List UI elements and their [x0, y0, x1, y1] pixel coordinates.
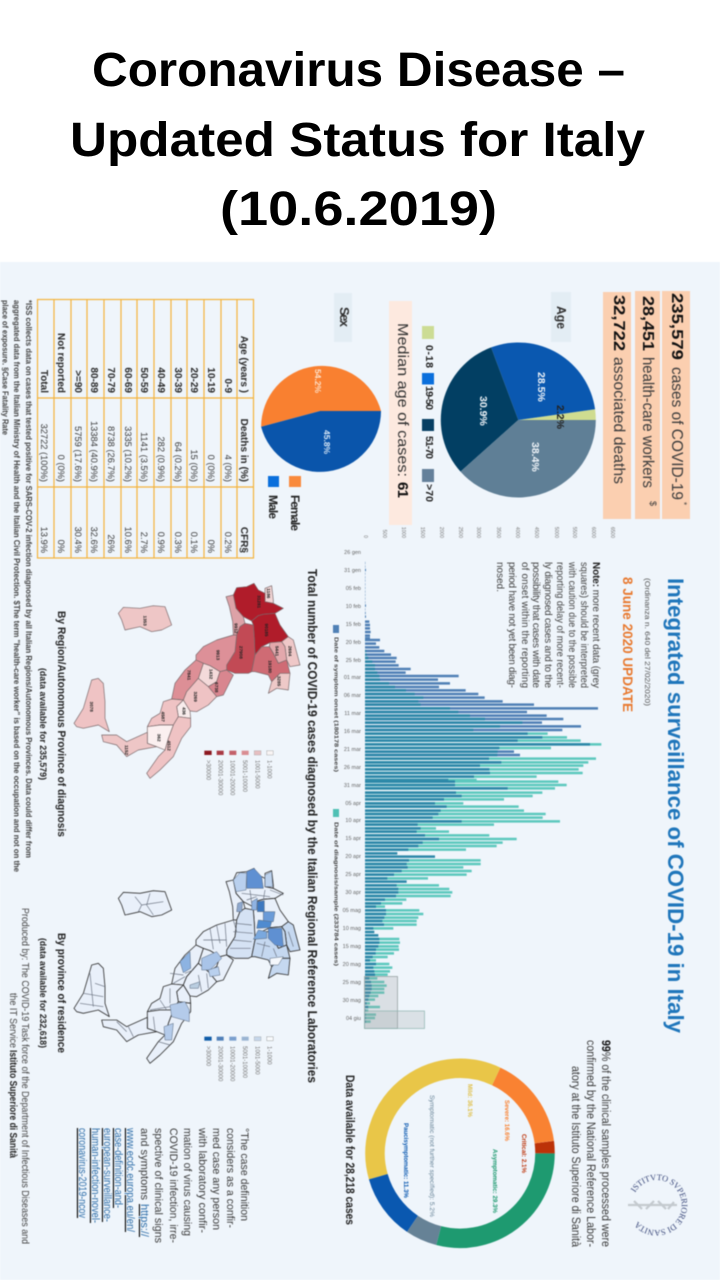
- deaths by age table: 80-89: [88, 367, 99, 393]
- sex pie chart: 45.8%: [322, 430, 332, 455]
- stat boxes: cases of COVID-19: [668, 367, 685, 500]
- ordinance subtitle: (Ordinanza n. 640 del 27/02/2020): [643, 578, 652, 707]
- deaths by age table: 26%: [106, 534, 116, 553]
- value axis labels: 3500: [495, 527, 501, 538]
- value axis labels: 3000: [475, 527, 481, 538]
- case definition text: spective of clinical signs: [152, 1128, 164, 1243]
- map: cases by region: 1432: [208, 669, 213, 680]
- date axis labels: 16 mar: [344, 729, 361, 735]
- province map caption: (data available for 232,618): [38, 938, 48, 1048]
- deaths by age table: 30.4%: [73, 527, 83, 553]
- deaths by age table: 50-59: [138, 367, 149, 393]
- footnote: place of exposure. §Case Fatality Rate: [0, 300, 10, 436]
- map: cases by region: 90185: [264, 624, 269, 637]
- chart legend: Date of diagnosis/sample (233784 cases): [332, 822, 338, 966]
- region map caption: [38, 611, 67, 837]
- date axis labels: 31 gen: [344, 568, 361, 574]
- case definition text: med case any person: [210, 1128, 222, 1230]
- producer credit: Istituto Superiore di Sanità: [7, 1050, 18, 1158]
- age heading tag: [551, 292, 571, 342]
- case definition text: mation of virus causing: [181, 1128, 193, 1236]
- value axis labels: 1000: [400, 527, 406, 538]
- producer credit: Produced by: The COVID-19 Task force of the Department of Infectious Diseases and: [19, 908, 30, 1244]
- deaths by age table: 60-69: [122, 367, 133, 393]
- date axis labels: 31 mar: [344, 783, 361, 789]
- sex legend: [266, 476, 302, 531]
- legend: region map: >30000: [205, 760, 211, 781]
- date axis labels: 10 feb: [346, 604, 361, 610]
- age legend: 0-18: [423, 345, 435, 368]
- note text: [494, 561, 601, 688]
- deaths by age table: [37, 299, 254, 558]
- footnote: aggregated data from the Italian Ministry of Health and the Italian Civil Protection. $The term "health-care worker" is based on the occupation and not on the: [12, 300, 21, 873]
- note text: nosed.: [494, 562, 505, 592]
- deaths by age table: Deaths in (%): [238, 419, 249, 482]
- map: cases by region: 3285: [276, 676, 281, 687]
- deaths by age table: 64 (0.2%): [173, 442, 183, 482]
- deaths by age table: 10.6%: [123, 527, 133, 553]
- deaths by age table: 0.1%: [189, 532, 199, 553]
- date axis labels: 06 mar: [344, 693, 361, 699]
- value axis labels: 4000: [514, 527, 520, 538]
- title: Updated Status for Italy: [70, 114, 645, 167]
- legend: region map: 20001-30000: [216, 760, 222, 796]
- median age box: [389, 301, 412, 525]
- deaths by age table: 32.6%: [89, 527, 99, 553]
- note text: period have not yet been diag-: [506, 562, 517, 688]
- age pie chart: 28.5%: [535, 372, 547, 402]
- chart legend: Date of symptom onset (180178 cases): [332, 637, 338, 772]
- deaths by age table: 15 (0%): [189, 449, 199, 482]
- note text: ly diagnosed cases and to the: [542, 562, 553, 688]
- main heading: Integrated surveillance of COVID-19 in Italy: [663, 578, 688, 1034]
- map: cases by region: 1353: [142, 615, 147, 626]
- doughnut chart: clinical status: Critical: 2.1%: [520, 1134, 527, 1173]
- doughnut chart: clinical status: Asymptomatic: 29.3%: [491, 1149, 498, 1213]
- case definition text: with laboratory confir-: [196, 1127, 208, 1233]
- date axis labels: 04 giu: [346, 1016, 361, 1022]
- deaths by age table: 13.9%: [39, 527, 49, 553]
- map: cases by region: 7841: [186, 670, 191, 681]
- legend: province map: 10001-20000: [229, 1046, 235, 1082]
- map: cases by region: 3269: [193, 691, 198, 702]
- producer credit: [7, 908, 30, 1244]
- confirmation statement: confirmed by the National Reference Labor-: [584, 1040, 596, 1247]
- age pie chart: [441, 342, 596, 497]
- map: cases by region: [74, 583, 300, 778]
- deaths by age table: 32722 (100%): [39, 424, 49, 482]
- age heading tag: Age: [554, 306, 569, 329]
- value axis labels: 2000: [438, 527, 444, 538]
- stat boxes: health-care workers: [639, 357, 656, 488]
- age pie chart: 38.4%: [529, 442, 541, 472]
- date axis labels: 05 mag: [343, 908, 361, 914]
- legend: region map: 5001-10000: [241, 760, 247, 793]
- panel: surveillance infographic: [0, 262, 720, 1280]
- deaths by age table: 0.2%: [223, 532, 233, 553]
- deaths by age table: CFR§: [238, 527, 249, 553]
- deaths by age table: 70-79: [105, 367, 116, 393]
- date axis labels: 05 feb: [346, 586, 361, 592]
- date axis labels: 10 apr: [345, 818, 361, 824]
- case definition text: COVID-19 infection, irre-: [167, 1128, 179, 1243]
- deaths by age table: Age (years ): [238, 336, 249, 393]
- case definition text: www.ecdc.europa.eu/en/: [124, 1127, 136, 1233]
- map: cases by region: 9913: [216, 650, 221, 661]
- case definition text: [76, 1127, 250, 1243]
- value axis labels: [362, 527, 615, 538]
- date axis labels: [343, 550, 361, 1022]
- icon: institute logo: ISTITVTO SVPERIORE DI SANITA: [630, 1174, 688, 1236]
- date axis labels: 11 mar: [344, 711, 361, 717]
- value axis labels: 1500: [419, 527, 425, 538]
- sex heading tag: Sex: [337, 307, 352, 328]
- title: Coronavirus Disease –: [92, 44, 625, 97]
- note text: Note: more recent data (grey: [590, 562, 601, 688]
- confirmation statement: [569, 1040, 611, 1248]
- deaths by age table: 0%: [206, 540, 216, 553]
- age legend: 19-50: [423, 386, 435, 410]
- map: cases by region: 9912: [233, 623, 238, 634]
- chart legend: [332, 625, 339, 966]
- deaths by age table: 30-39: [172, 367, 183, 393]
- value axis labels: 5500: [571, 527, 577, 538]
- map: cases by region: 362: [156, 734, 161, 742]
- confirmation statement: 99 % of the clinical samples processed were: [599, 1040, 611, 1247]
- update date: 8 June 2020 UPDATE: [620, 577, 635, 712]
- note text: possibility that cases with date: [530, 562, 541, 688]
- sex heading tag: [334, 293, 352, 342]
- date axis labels: 26 mar: [344, 765, 361, 771]
- age pie chart: 30.9%: [477, 396, 489, 426]
- map: cases by region: 19180: [267, 660, 272, 674]
- doughnut chart: clinical status: Paucisymptomatic: 11.3%: [402, 1123, 409, 1198]
- deaths by age table: 2.7%: [139, 532, 149, 553]
- stat boxes: *: [679, 502, 688, 505]
- doughnut caption: Data available for 28,218 cases: [343, 1075, 357, 1225]
- deaths by age table: 10-19: [205, 367, 216, 393]
- value axis labels: 5000: [553, 527, 559, 538]
- deaths by age table: 0 (0%): [56, 455, 66, 482]
- province map caption: By province of residence: [55, 933, 67, 1053]
- stat boxes: 32,722: [610, 295, 627, 351]
- date axis labels: 01 mar: [344, 675, 361, 681]
- map: cases by region: 31281: [256, 595, 261, 609]
- deaths by age table: 20-29: [188, 367, 199, 393]
- deaths by age table: 13384 (40.9%): [89, 421, 99, 482]
- map: cases by province: [74, 868, 300, 1063]
- median age box: 61: [394, 482, 411, 498]
- legend: region map: 1-1000: [266, 760, 272, 779]
- case definition text: human-infection-novel-: [89, 1128, 101, 1223]
- date axis labels: 30 mag: [343, 998, 361, 1004]
- map: cases by region: 1186: [266, 588, 271, 599]
- stat boxes: $: [648, 501, 658, 506]
- date axis labels: 25 feb: [346, 658, 361, 664]
- map: cases by region: 5441: [275, 646, 280, 657]
- legend: province map: 1001-5000: [253, 1046, 259, 1075]
- map: cases by region: 2694: [287, 646, 292, 657]
- sex legend: Female: [288, 495, 302, 531]
- deaths by age table: 8738 (26.7%): [106, 426, 116, 482]
- value axis labels: 6000: [590, 527, 596, 538]
- map: cases by region: 4512: [166, 740, 171, 751]
- bars: symptom onset, early period: [365, 563, 601, 780]
- sex pie chart: 54.2%: [313, 369, 323, 394]
- case definition text: and symptoms: [138, 1128, 150, 1200]
- deaths by age table: >=90: [72, 370, 83, 393]
- case definition text: °The case definition: [238, 1128, 250, 1221]
- region map caption: By Region/Autonomous Province of diagnosis: [55, 611, 67, 837]
- age legend: >70: [423, 484, 435, 502]
- date axis labels: 25 mag: [343, 980, 361, 986]
- region map caption: (data available for 235,579): [38, 668, 48, 780]
- value axis labels: 4500: [533, 527, 539, 538]
- deaths by age table: Not reported: [55, 333, 66, 393]
- bar chart: cases by date: [332, 527, 615, 1028]
- footnote: *ISS collects data on cases that tested positive for SARS-COV-2 infection diagnosed by all Italian Regions/Autonomous Provinces. Data could differ from: [24, 300, 33, 858]
- recent data grey squares: [364, 976, 424, 1028]
- date axis labels: 15 feb: [346, 622, 361, 628]
- deaths by age table: 40-49: [155, 367, 166, 393]
- deaths by age table: 0.9%: [156, 532, 166, 553]
- date axis labels: 20 feb: [346, 640, 361, 646]
- map: cases by region: 436: [182, 707, 187, 715]
- date axis labels: 10 mag: [343, 926, 361, 932]
- deaths by age table: 0%: [56, 540, 66, 553]
- case definition text: european-surveillance-: [101, 1128, 113, 1222]
- map: cases by region: 3078: [89, 701, 94, 712]
- legend: province map: 20001-30000: [216, 1046, 222, 1082]
- province map caption: [38, 933, 67, 1053]
- case definition text: https://: [138, 1204, 150, 1238]
- deaths by age table: 0-9: [222, 379, 233, 393]
- legend: province map: [204, 1037, 273, 1082]
- legend: region map: [204, 751, 273, 796]
- date axis labels: 21 mar: [344, 747, 361, 753]
- province highlighted areas: [80, 868, 293, 1045]
- age legend: 51-70: [423, 436, 435, 459]
- date axis labels: 26 gen: [344, 550, 361, 556]
- case definition text: considers as a confir-: [224, 1128, 236, 1228]
- stat boxes: 28,451: [639, 296, 656, 351]
- title: [70, 44, 645, 236]
- title: (10.6.2019): [220, 183, 497, 236]
- note text: reporting delay of more recent-: [554, 562, 565, 688]
- value axis labels: 0: [362, 535, 368, 538]
- median age box: Median age of cases:: [394, 323, 411, 477]
- deaths by age table: 3335 (10.2%): [123, 426, 133, 482]
- deaths by age table: 4 (0%): [223, 455, 233, 482]
- doughnut chart: clinical status: Mild: 36.1%: [466, 1084, 473, 1117]
- legend: province map: >30000: [205, 1046, 211, 1067]
- legend: province map: 1-1000: [266, 1046, 272, 1065]
- deaths by age table: Total: [38, 370, 49, 393]
- legend: region map: 10001-20000: [229, 760, 235, 796]
- date axis labels: 15 mag: [343, 944, 361, 950]
- note text: of onset within the reporting: [519, 562, 530, 688]
- case definition text: coronavirus-2019-ncov: [76, 1128, 88, 1218]
- deaths by age table: 0 (0%): [206, 455, 216, 482]
- stat boxes: associated deaths: [610, 357, 627, 484]
- age pie chart: 2.2%: [554, 405, 566, 430]
- date axis labels: 20 mag: [343, 962, 361, 968]
- note text: with caution due to the possible: [566, 561, 577, 688]
- note text: squares) should be interpreted: [578, 562, 589, 688]
- footnote: [0, 300, 33, 873]
- deaths by age table: 0.3%: [173, 532, 183, 553]
- stat boxes: 235,579: [668, 293, 685, 360]
- producer credit: the IT Service: [7, 993, 18, 1048]
- bars: diagnosis date, later period: [365, 782, 567, 1022]
- map: cases by region: 1152: [124, 745, 129, 755]
- date axis labels: 15 apr: [345, 836, 361, 842]
- map: cases by region: 6738: [214, 682, 219, 693]
- date axis labels: 05 apr: [345, 801, 361, 807]
- legend: province map: 5001-10000: [241, 1046, 247, 1079]
- date axis labels: 30 apr: [345, 890, 361, 896]
- doughnut chart: clinical status: Severe: 16.6%: [503, 1100, 510, 1141]
- sex pie chart: [261, 366, 381, 472]
- doughnut chart: clinical status: Symptomatic (not further specified): 5.2%: [428, 1095, 435, 1217]
- stat boxes: [603, 291, 690, 519]
- value axis labels: 2500: [457, 527, 463, 538]
- deaths by age table: 5759 (17.6%): [73, 426, 83, 482]
- case definition text: case-definition-and-: [112, 1128, 124, 1208]
- deaths by age table: 1141 (3.5%): [139, 432, 149, 482]
- doughnut chart: clinical status: [375, 1068, 545, 1238]
- date axis labels: 20 apr: [345, 854, 361, 860]
- confirmation statement: atory at the Istituto Superiore di Sanità: [569, 1066, 581, 1248]
- value axis labels: 6500: [609, 527, 615, 538]
- maps heading: Total number of COVID-19 cases diagnosed by the Italian Regional Reference Laboratories: [305, 569, 320, 1083]
- map: cases by region: 4587: [161, 711, 166, 722]
- date axis labels: 25 apr: [345, 872, 361, 878]
- map: cases by region: 27908: [238, 646, 243, 659]
- value axis labels: 500: [381, 530, 387, 538]
- legend: region map: 1001-5000: [253, 760, 259, 789]
- deaths by age table: 282 (0.9%): [156, 437, 166, 482]
- age legend: [422, 326, 435, 502]
- sex legend: Male: [266, 495, 280, 519]
